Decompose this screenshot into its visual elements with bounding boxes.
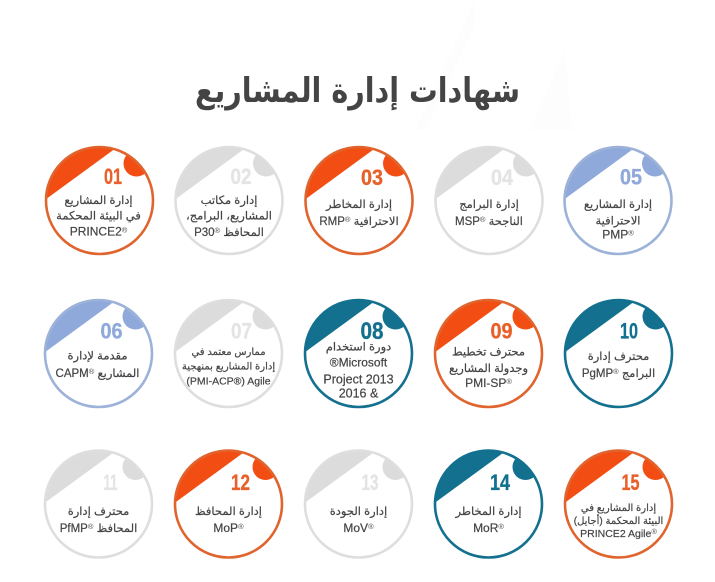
label: ‎ (60, 522, 137, 535)
badge (174, 450, 282, 558)
label: ® (506, 377, 512, 386)
certificate 12 (174, 450, 282, 558)
label (449, 346, 528, 390)
label: ® (215, 226, 221, 235)
badge (174, 300, 282, 407)
label (56, 350, 139, 381)
label: المشاريع، البرامج، (186, 210, 272, 224)
label: ® (498, 522, 504, 531)
number: 06 (100, 318, 122, 344)
number: 07 (231, 318, 252, 344)
label: إدارة المخاطر (454, 506, 522, 519)
label (582, 351, 655, 381)
badge (44, 450, 152, 558)
badge (564, 300, 672, 407)
label: إدارة البرامج (459, 199, 519, 212)
number: 12 (231, 470, 250, 495)
badge (46, 147, 153, 254)
label (574, 503, 663, 540)
label: ® (651, 527, 657, 536)
certificate 13 (304, 450, 412, 558)
certificate 02 (175, 147, 282, 254)
label: البيئة المحكمة (أجايل) (574, 514, 663, 527)
label: PRINCE2 Agile (580, 528, 651, 540)
label: ® (368, 522, 374, 531)
label: محترف إدارة (588, 351, 649, 364)
label: PMI-SP (465, 376, 506, 390)
certificate 05 (564, 147, 672, 254)
label: ® (613, 367, 619, 376)
certificate 07 (174, 300, 282, 407)
label: ®Microsoft (330, 356, 388, 370)
label: الاحترافية RMP (319, 216, 399, 228)
label: MoV (343, 521, 368, 535)
number: 01 (104, 164, 122, 189)
label: PMP (602, 228, 628, 242)
number: 05 (620, 164, 642, 190)
badge (564, 450, 672, 558)
label (454, 506, 522, 535)
label: Project 2013 (323, 372, 394, 386)
label: ® (628, 228, 634, 238)
label: 2016 & (339, 386, 379, 400)
label (195, 506, 262, 535)
label: ® (88, 522, 94, 531)
label: إدارة المشاريع (64, 195, 133, 208)
label: إدارة المحافظ (195, 506, 262, 519)
badge (435, 147, 542, 254)
label: إدارة المشاريع في (581, 503, 656, 514)
badge (564, 147, 672, 254)
number: 04 (491, 165, 514, 190)
label: ® (89, 367, 95, 376)
label: MoR (473, 521, 498, 535)
label: (PMI-ACP®) Agile (186, 376, 271, 388)
badge (305, 147, 412, 254)
label (60, 506, 137, 535)
number: 13 (362, 470, 378, 495)
label: إدارة المخاطر (325, 199, 392, 212)
certificate 14 (434, 450, 542, 558)
certificate 09 (434, 300, 542, 407)
label: مقدمة لإدارة (68, 350, 128, 364)
label: إدارة المشاريع بمنهجية (182, 362, 275, 372)
label: ‎ (582, 367, 655, 381)
label: ‎ (194, 226, 264, 239)
label: المحافظ P30 (194, 227, 264, 239)
certificate 08 (304, 300, 412, 407)
label (186, 195, 272, 239)
label: PRINCE2 (70, 224, 122, 238)
label: المشاريع CAPM (56, 368, 139, 380)
label (330, 506, 387, 535)
label (323, 342, 394, 400)
label: وجدولة المشاريع (449, 363, 528, 376)
label: دورة استخدام (326, 342, 391, 354)
certificate 03 (305, 147, 412, 254)
label: ® (122, 226, 128, 234)
badge (44, 300, 152, 407)
badge (304, 450, 412, 558)
certificate 01 (46, 147, 153, 254)
certificate 04 (435, 147, 542, 254)
label: MoP (213, 521, 238, 535)
certificate 10 (564, 300, 672, 407)
title: شهادات إدارة المشاريع (195, 71, 520, 111)
label: ‎ (455, 215, 523, 228)
label (455, 199, 523, 228)
badge (434, 450, 542, 558)
number: 14 (490, 470, 511, 495)
label (56, 195, 141, 238)
number: 08 (360, 318, 384, 345)
number: 09 (490, 318, 512, 344)
label: ® (238, 522, 244, 531)
badge (434, 300, 542, 407)
label: ‎ (319, 215, 399, 229)
badge (175, 147, 282, 254)
label: ممارس معتمد في (191, 347, 266, 358)
label: الاحترافية (595, 216, 641, 228)
label: محترف إدارة (68, 506, 129, 519)
number: 10 (620, 318, 638, 344)
label: إدارة مكاتب (201, 195, 257, 208)
label: إدارة المشاريع (584, 199, 652, 212)
label (319, 199, 399, 229)
label: المحافظ PfMP (60, 523, 137, 535)
label: محترف تخطيط (452, 346, 525, 360)
number: 11 (104, 470, 118, 495)
label: الناجحة MSP (455, 216, 523, 228)
label: في البيئة المحكمة (56, 210, 141, 222)
label: ® (480, 215, 486, 224)
label: البرامج PgMP (582, 368, 655, 380)
label: ® (345, 215, 351, 224)
certificate 11 (44, 450, 152, 558)
certificate 15 (564, 450, 672, 558)
certificate 06 (44, 300, 152, 407)
label: إدارة الجودة (330, 506, 387, 519)
number: 15 (622, 470, 640, 495)
number: 02 (230, 164, 252, 189)
number: 03 (361, 165, 383, 190)
label (584, 199, 652, 242)
label: ‎ (56, 367, 139, 381)
badge (304, 300, 412, 407)
label (182, 347, 275, 388)
